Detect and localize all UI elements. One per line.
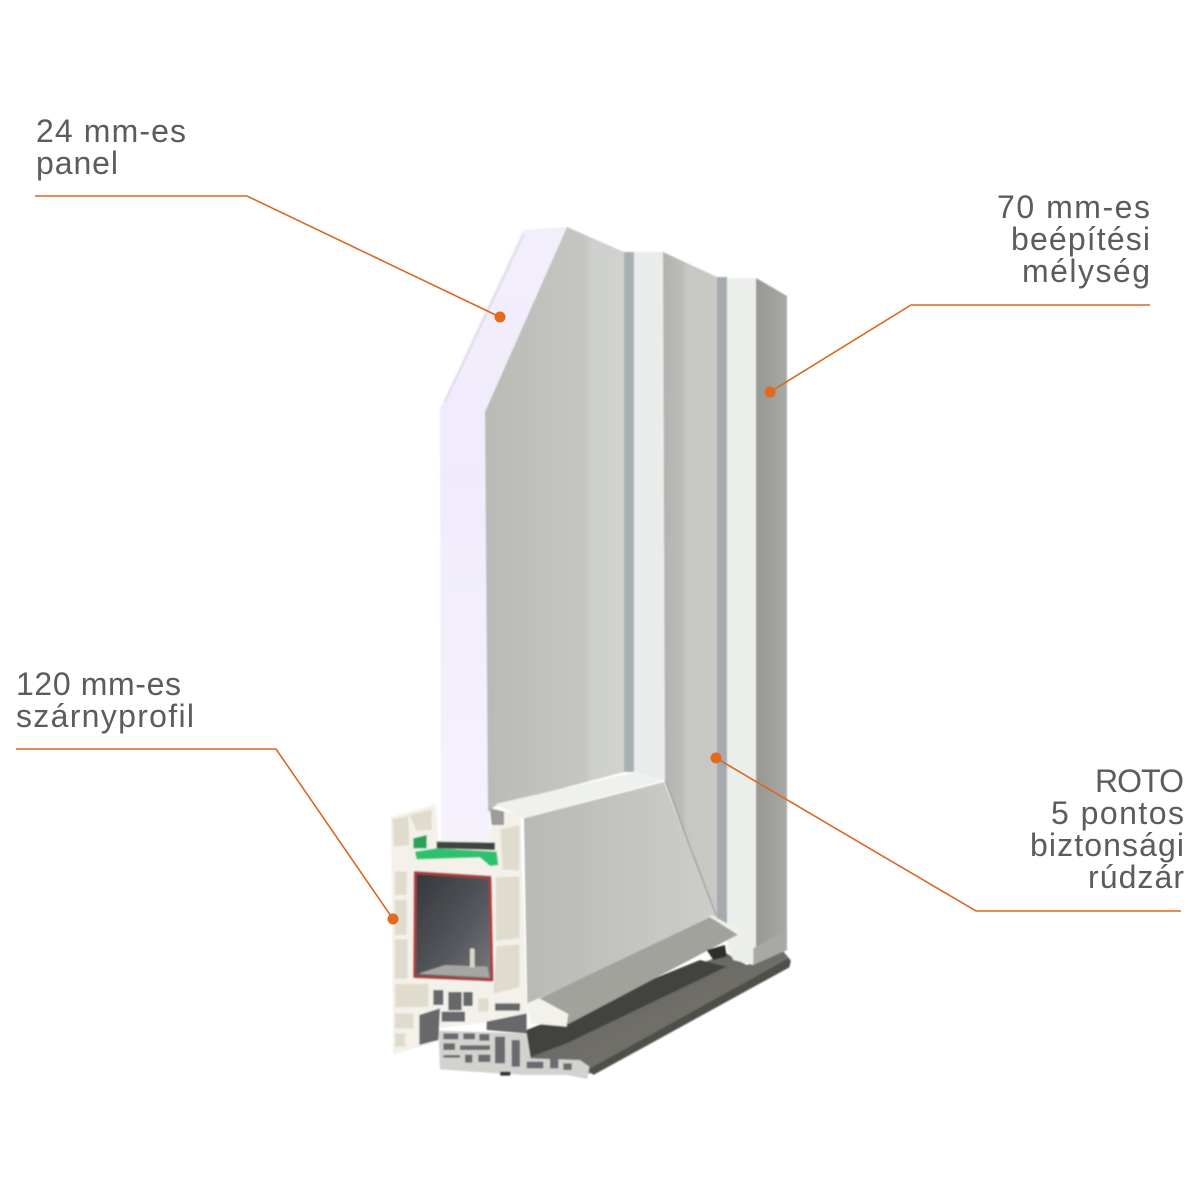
lower gray face: [524, 782, 716, 1004]
shadow under sill: [707, 945, 727, 960]
white frame vertical: [634, 252, 665, 781]
label: ROTO: [1095, 763, 1184, 799]
label: rúdzár: [1088, 859, 1184, 895]
label: panel: [36, 145, 118, 181]
glazing clip: [490, 808, 504, 825]
dot: [764, 386, 776, 398]
label: 70 mm-es: [997, 189, 1150, 225]
panel edge thin line: [445, 234, 524, 402]
outer gasket: [717, 277, 727, 925]
leader line: [770, 305, 1150, 392]
label: szárnyprofil: [16, 698, 194, 734]
outer white frame: [727, 278, 756, 966]
callout: ROTO lock: [710, 752, 1184, 911]
threshold section: [438, 1031, 589, 1079]
side face: [756, 278, 787, 968]
dot: [494, 312, 506, 322]
side-face foot: [753, 930, 787, 965]
label: 24 mm-es: [36, 113, 186, 149]
label: mélység: [1022, 253, 1150, 289]
callout: 70 mm depth: [764, 189, 1150, 398]
white foot of frame: [727, 938, 753, 965]
panel edge: lilac white: [440, 227, 567, 844]
door profile illustration: [391, 227, 791, 1079]
inner gasket one: [624, 252, 634, 772]
callout: 24 mm panel: [35, 113, 506, 322]
steel reinforcement: [415, 873, 492, 980]
dot: [710, 752, 722, 764]
panel face: [485, 227, 624, 812]
leader line: [35, 196, 500, 317]
leader line: [16, 749, 393, 919]
frame gray slope: [663, 252, 717, 925]
sill cap white end: [527, 998, 568, 1027]
label: beépítési: [1011, 221, 1150, 257]
leader line: [716, 758, 1181, 911]
sill cap far end: [708, 916, 743, 937]
label: 5 pontos: [1051, 795, 1184, 831]
threshold: [527, 952, 791, 1075]
corner seam: [665, 781, 716, 915]
green gasket: [413, 835, 498, 866]
sash profile section: [391, 804, 527, 1054]
label: biztonsági: [1030, 827, 1184, 863]
label: 120 mm-es: [16, 666, 181, 702]
white horizontal frame: [495, 772, 665, 818]
dot: [388, 914, 398, 924]
sill cap top: [539, 917, 742, 1024]
callout: 120 mm sash profile: [16, 666, 398, 924]
